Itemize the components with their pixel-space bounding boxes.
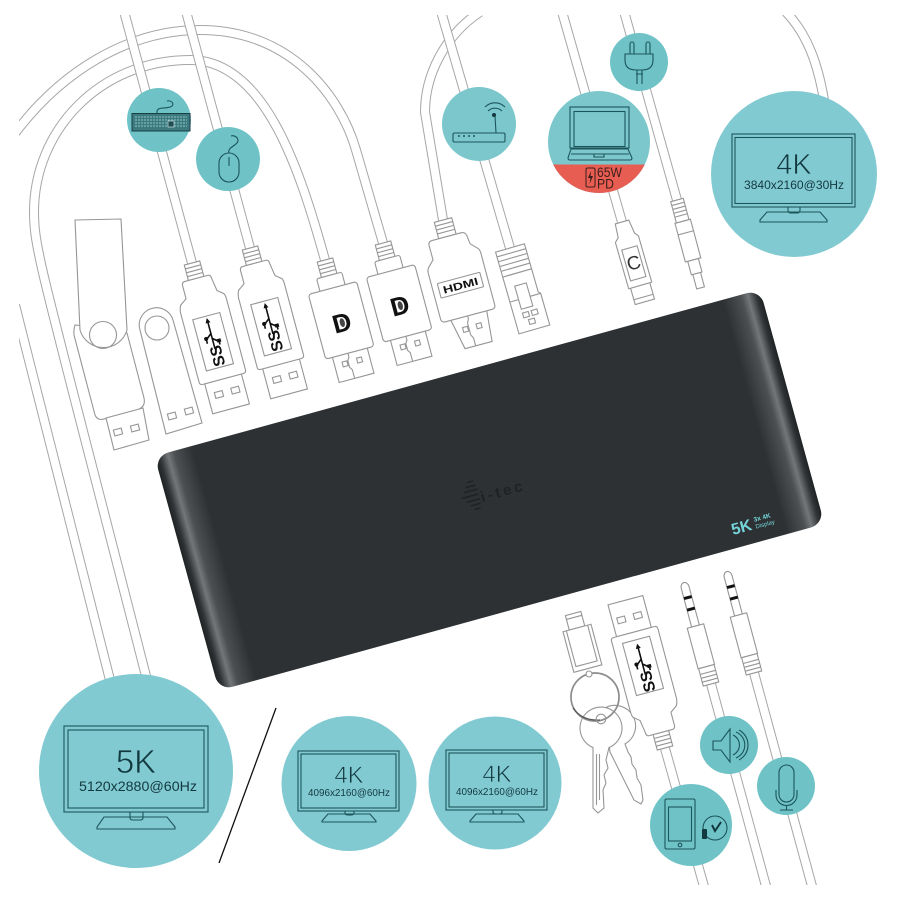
USB flash drive: flat xyxy=(139,308,202,434)
USB flash drive: swivel xyxy=(74,219,149,450)
icon: 4K display 4096x2160 right: 4096x2160@60Hz xyxy=(456,787,538,798)
cable: lower USB xyxy=(664,745,706,895)
cable: outer arc to second DisplayPort xyxy=(10,30,383,243)
5K badge xyxy=(730,511,776,539)
cable: lower left to 5K display xyxy=(15,305,110,680)
5K badge: 5K xyxy=(730,517,754,539)
cable: laptop xyxy=(560,5,622,222)
lightning connector xyxy=(559,610,602,672)
icon: mouse xyxy=(196,127,260,191)
icon: 4K display 3840x2160: 3840x2160@30Hz xyxy=(744,178,844,192)
icon: 4K display 4096x2160 right xyxy=(428,716,562,850)
5K badge: 3x 4K xyxy=(753,512,772,524)
icon: keyboard xyxy=(127,88,191,152)
icon: router xyxy=(442,87,516,161)
connector: DC power jack xyxy=(669,198,708,290)
icon: laptop with 65W PD xyxy=(548,91,650,193)
connector: DisplayPort 1 xyxy=(301,254,381,384)
connector: lower USB 3: SS xyxy=(638,668,660,694)
connector: USB 3 keyboard xyxy=(169,257,254,415)
cable: network xyxy=(439,5,510,248)
cable: power xyxy=(622,5,677,200)
connector: USB-C xyxy=(610,219,656,305)
key ring xyxy=(571,671,619,724)
connector: microphone audio jack xyxy=(719,569,762,675)
connector: speaker audio jack xyxy=(676,580,719,686)
icon: 4K display 4096x2160 middle xyxy=(282,716,416,851)
icon: 5K display 5120x2880: 5120x2880@60Hz xyxy=(79,778,197,794)
icon: laptop with 65W PD: PD xyxy=(597,176,614,192)
icon: 4K display 4096x2160 middle: 4K xyxy=(334,762,364,789)
cable: keyboard xyxy=(122,5,192,263)
connector: USB 3 keyboard: SS xyxy=(207,343,229,368)
cable: mouse xyxy=(184,5,250,248)
cable: inner arc to first DisplayPort xyxy=(34,60,325,680)
connector: HDMI xyxy=(416,213,504,353)
cable: speaker xyxy=(711,684,768,895)
icon: 4K display 3840x2160: 4K xyxy=(776,149,812,181)
5K badge: Display xyxy=(755,520,776,531)
icon: microphone xyxy=(757,757,815,815)
dock body xyxy=(155,289,824,691)
icon: 4K display 3840x2160 xyxy=(711,91,877,257)
icon: 5K display 5120x2880: 5K xyxy=(116,743,156,780)
cable: HDMI xyxy=(425,12,480,220)
icon: speaker xyxy=(700,716,758,774)
icon: plug xyxy=(610,33,668,91)
connector: RJ45 network xyxy=(496,243,550,334)
connector: USB 3 mouse: SS xyxy=(265,328,287,353)
connector: DisplayPort 1: D xyxy=(329,306,355,340)
cable: microphone xyxy=(754,673,814,895)
rear key xyxy=(605,705,643,804)
connector: DisplayPort 2: D xyxy=(387,289,413,323)
divider line xyxy=(219,708,276,863)
icon: 4K display 4096x2160 right: 4K xyxy=(482,761,512,788)
icon: 4K display 4096x2160 middle: 4096x2160@60Hz xyxy=(308,788,390,799)
front key xyxy=(580,707,622,813)
icon: 5K display 5120x2880 xyxy=(39,674,233,868)
connector: USB 3 mouse xyxy=(227,242,312,400)
connector: HDMI: HDMI xyxy=(442,276,480,297)
icon: laptop with 65W PD: 65W xyxy=(597,164,623,180)
i-tec logo xyxy=(458,478,525,512)
connector: lower USB 3 xyxy=(602,594,688,754)
docking station xyxy=(155,289,824,691)
i-tec logo: i-tec xyxy=(479,478,525,506)
device: lightning connector and keys xyxy=(559,610,643,813)
icon: phone charging xyxy=(650,784,732,866)
connector: USB-C: C xyxy=(624,252,643,276)
connector: DisplayPort 2 xyxy=(359,237,439,367)
cable: 4K display xyxy=(786,12,824,100)
